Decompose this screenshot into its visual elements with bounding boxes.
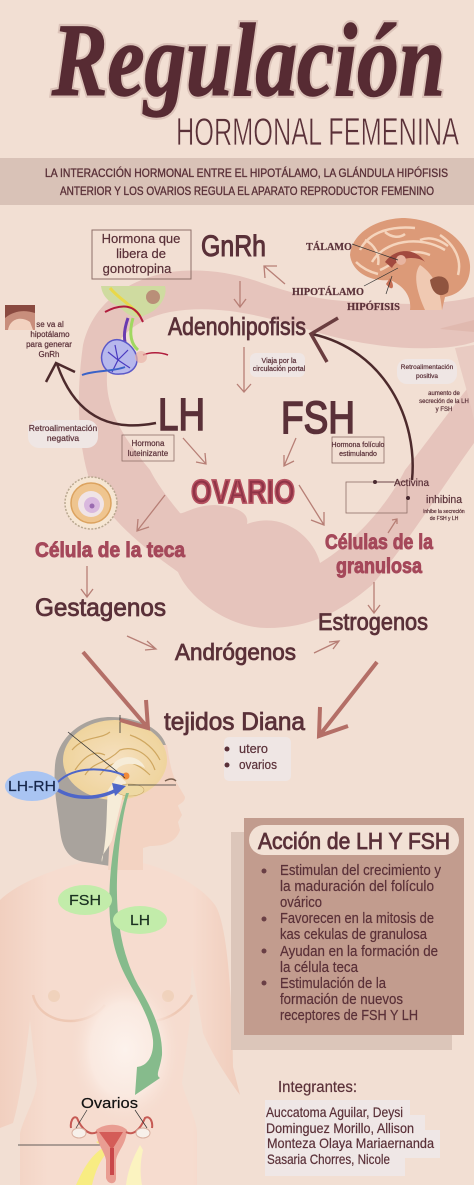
arrow: ovario to granulosa — [299, 485, 324, 525]
note: se va al hipotálamo: hipotálamo — [30, 330, 70, 339]
note: aumento de secreción — [419, 391, 469, 413]
bubble: viaja por la circulación portal — [250, 353, 306, 377]
heading FSH: FSH — [281, 392, 355, 443]
diagram: activina inhibina box: inhibe la secreción — [423, 509, 465, 515]
arrow: andrógenos to estrogenos — [314, 641, 339, 653]
bubble: utero ovarios — [224, 737, 291, 781]
bullet list: Estimulan del crecimiento y — [280, 863, 442, 879]
box: hormona que libera — [92, 230, 191, 279]
lines — [18, 715, 176, 1145]
arrow: granulosa to estrogenos — [368, 582, 380, 613]
oval: FSH — [58, 885, 112, 915]
icon: uterus — [71, 1110, 152, 1183]
intro strip — [0, 158, 474, 205]
note: se va al hipotálamo: se va al — [36, 320, 64, 329]
heading Integrantes: Integrantes: — [278, 1079, 357, 1096]
heading: célula de la teca: Célula de la teca — [35, 539, 185, 562]
panel: acción de LH y FSH — [231, 818, 464, 1050]
box: hormona folículo estimulando: estimulando — [339, 451, 377, 458]
body illustration — [0, 715, 240, 1185]
arrows: blue LH-RH loop — [58, 769, 126, 797]
bubble: utero ovarios: utero — [239, 741, 268, 756]
bubble: utero ovarios: ovarios — [239, 757, 277, 772]
box: hormona luteinizante: luteinizante — [128, 449, 169, 458]
hair — [55, 717, 167, 866]
diagram: activina inhibina box: inhibina — [426, 494, 463, 506]
bullet list: ovárico — [280, 895, 322, 911]
heading Andrógenos: Andrógenos — [175, 639, 296, 665]
small brain thumbnail — [5, 305, 35, 330]
diagram: activina inhibina box — [346, 477, 465, 522]
arrow: gestagenos to andrógenos — [127, 636, 156, 650]
box: hormona que libera: libera de — [116, 246, 166, 261]
label: tálamo — [306, 241, 398, 260]
note: aumento de secreción: secreción de la LH — [419, 399, 469, 405]
heading: células de la granulosa — [325, 531, 433, 578]
bubble: viaja por la circulación portal: Viaja por la — [262, 358, 297, 365]
background uterus ribbon — [79, 270, 474, 628]
heading: células de la granulosa: granulosa — [336, 555, 422, 578]
names block: Auccatoma Aguilar, Deysi — [266, 1104, 403, 1120]
bullet list: Favorecen en la mitosis de — [280, 911, 434, 927]
belly highlight — [67, 972, 183, 1128]
heading Adenohipofisis: Adenohipofisis — [168, 313, 306, 341]
bullet list: Estimulación de la — [280, 976, 387, 992]
arrow: positive feedback — [312, 334, 413, 480]
pituitary illustration — [82, 286, 168, 375]
label: hipófisis: HIPÓFISIS — [347, 301, 400, 313]
arrow: teca to gestagenos — [81, 566, 93, 597]
brain illustration — [350, 218, 470, 310]
arrow: GnRh to adenohipofisis — [234, 281, 246, 307]
heading Gestagenos: Gestagenos — [35, 594, 166, 622]
names block: Dominguez Morillo, Allison — [266, 1120, 414, 1136]
torso — [0, 845, 240, 1185]
note: se va al hipotálamo: para generar — [26, 340, 72, 349]
box: hormona folículo estimulando: Hormona folículo — [332, 442, 385, 449]
bubble: viaja por la circulación portal: circulación portal — [253, 366, 306, 373]
diagram: activina inhibina box: de FSH y LH — [430, 516, 459, 522]
arrow: FSH to ovario — [284, 438, 296, 466]
bubble: retroalimentación positiva — [397, 359, 457, 384]
icon: oocyte — [65, 477, 117, 529]
panel title: Acción de LH Y FSH — [258, 828, 450, 854]
oval: LH-RH — [5, 771, 59, 801]
oval: LH — [113, 906, 167, 934]
arrow: yellow pathway — [76, 1135, 143, 1185]
bullet list: la célula teca — [280, 960, 359, 976]
arrow: hipotálamo to GnRh — [264, 266, 285, 284]
bubble: retroalimentación negativa: Retroalimentación — [29, 423, 98, 433]
heading GnRh: GnRh — [201, 230, 266, 263]
bubble: retroalimentación negativa: negativa — [47, 433, 79, 443]
eye — [165, 779, 176, 781]
label: ovarios: Ovarios — [81, 1095, 138, 1112]
bullet list: kas cekulas de granulosa — [280, 927, 428, 943]
names block — [265, 1100, 440, 1176]
note: aumento de secreción: y FSH — [436, 407, 452, 413]
box: hormona que libera: gonotropina — [103, 261, 172, 276]
arrow: LH to ovario — [183, 438, 206, 464]
oval: FSH: FSH — [69, 892, 101, 909]
oval: LH-RH: LH-RH — [8, 778, 56, 795]
big arrow: gestagenos to tejidos diana — [83, 652, 148, 728]
brain — [63, 720, 167, 800]
heading LH: LH — [158, 389, 205, 440]
bullet list: la maduración del folículo — [280, 879, 434, 895]
arrow: ovario to teca — [137, 495, 165, 531]
heading: células de la granulosa: Células de la — [325, 531, 433, 554]
diagram: activina inhibina box: Activina — [394, 477, 429, 489]
label: hipófisis — [347, 276, 400, 313]
breasts — [33, 995, 192, 1021]
heading Estrogenos: Estrogenos — [318, 609, 428, 636]
bubble: retroalimentación negativa — [28, 420, 98, 448]
names block: Sasaria Chorres, Nicole — [267, 1151, 390, 1167]
bullet list — [262, 863, 442, 1024]
box: hormona folículo estimulando — [332, 437, 385, 463]
label: tálamo: TÁLAMO — [306, 241, 352, 253]
face — [108, 745, 185, 870]
note: se va al hipotálamo: GnRh — [39, 350, 59, 359]
label: hipotálamo: HIPOTÁLAMO — [292, 286, 364, 298]
bullet list: receptores de FSH Y LH — [280, 1008, 418, 1024]
box: hormona luteinizante — [122, 435, 174, 461]
heading tejidos Diana: tejidos Diana — [164, 708, 305, 736]
note: se va al hipotálamo — [26, 320, 72, 359]
arrow: LH negative feedback — [46, 363, 156, 425]
bubble: retroalimentación positiva: positiva — [416, 373, 438, 380]
arrow: granulosa to activina — [388, 519, 397, 533]
heading OVARIO: OVARIO — [191, 473, 295, 510]
bullet list: formación de nuevos — [280, 992, 403, 1008]
arrowhead: positive feedback — [311, 318, 338, 362]
label: hipotálamo — [292, 268, 398, 298]
arrow: adenohipofisis down — [237, 347, 251, 392]
arrow: green pathway — [109, 793, 162, 1095]
box: hormona que libera: Hormona que — [102, 231, 180, 246]
bubble: retroalimentación positiva: Retroalimentación — [401, 364, 454, 371]
oval: LH: LH — [130, 912, 150, 929]
names block: Monteza Olaya Mariaernanda — [267, 1135, 434, 1151]
bullet list: Ayudan en la formación de — [280, 944, 438, 960]
note: aumento de secreción: aumento de — [428, 391, 461, 397]
big arrow: estrogenos to tejidos diana — [319, 662, 377, 736]
box: hormona luteinizante: Hormona — [132, 439, 165, 448]
